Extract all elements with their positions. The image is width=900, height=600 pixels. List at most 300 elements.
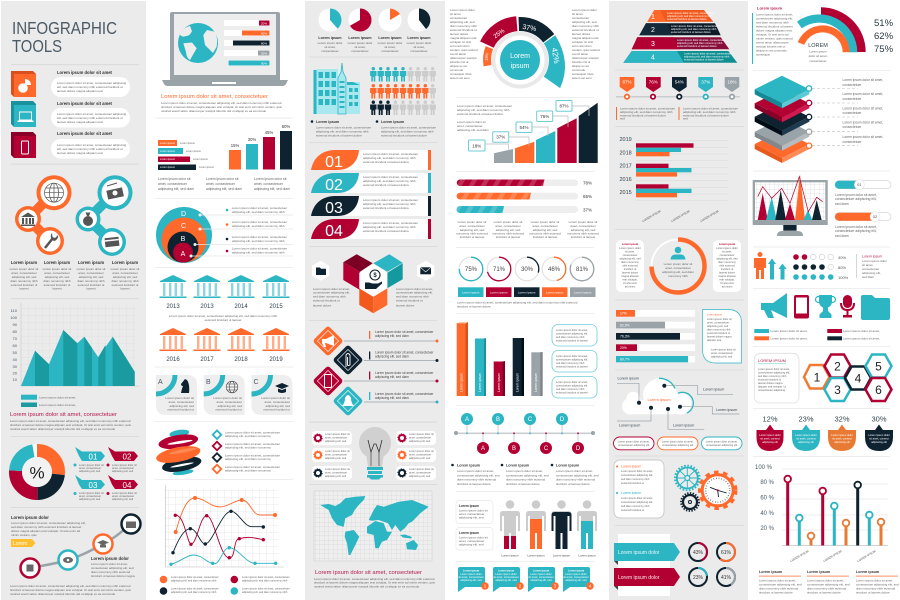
text block: row three bbox=[51, 131, 130, 158]
diagram: isometric stacked layers: consectetuer bbox=[842, 83, 862, 87]
text block: staircase: euismod tincidunt ut laoreet dolore bbox=[457, 112, 503, 116]
chart: percent drops: adipiscing elit bbox=[871, 440, 887, 444]
text block: four columns: Lorem ipsum dolor sit bbox=[10, 267, 38, 271]
legend: icon row: Lorem ipsum dolor sit amet, bbox=[843, 329, 880, 333]
heading: map: Lorem ipsum dolor sit amet, consectetuer bbox=[315, 570, 422, 576]
icon: trophy bbox=[816, 295, 836, 318]
chart: progress bars: 78% bbox=[583, 180, 592, 186]
list: numbered 01 to 04: 03 bbox=[325, 200, 343, 217]
chart: labelled progress tracks bbox=[616, 310, 695, 362]
side card: left of ring: Ut wisi enim bbox=[623, 281, 637, 285]
diagram: numbered hexagons: 1 bbox=[814, 370, 821, 384]
side card: right of ring: erat volutpat. bbox=[720, 278, 735, 282]
diagram: isometric cubes with hand and coin: laoreet dolore bbox=[396, 304, 415, 308]
text block: bar chart columns: amet, consectetuer bbox=[206, 182, 236, 186]
charts: four pies: Lorem ipsum dolor bbox=[318, 41, 342, 45]
callout: teal outline card: amet, consectetuer bbox=[711, 351, 733, 355]
legend: area chart: Lorem ipsum dolor sit amet, bbox=[39, 403, 76, 407]
cards: A B C: amet, consectetuer bbox=[264, 400, 290, 404]
text block: progress columns: tincidunt ut laoreet bbox=[571, 235, 595, 239]
labels: years top: 2015 bbox=[269, 304, 283, 310]
timeline: percent pin tags: 54% bbox=[675, 80, 684, 84]
chart: horizontal bars: Lorem ipsum bbox=[160, 149, 175, 153]
list: numbered 01 to 04: euismod tincidunt ut laoreet dolore bbox=[363, 229, 409, 233]
text block: buildings captions: euismod tincidunt ut laoreet dolore bbox=[316, 134, 362, 138]
text block: four columns: diam nonummy nibh bbox=[111, 279, 139, 283]
card: Lorem Ipsum outline: laoreet dolore magna bbox=[758, 381, 783, 385]
chart: radial segments: 15% bbox=[484, 52, 489, 61]
list: numbered 01 to 04: 01 bbox=[325, 154, 343, 171]
callouts: three outlined boxes: consectetuer adipiscing elit, bbox=[556, 332, 588, 336]
callouts: people text boxes: adipiscing elit, sed bbox=[459, 542, 484, 546]
side card: right of ring: tincidunt ut bbox=[721, 267, 734, 271]
chart: percent drops: sit amet, consect bbox=[832, 436, 852, 440]
text block: bar chart columns: amet, consectetuer bbox=[158, 182, 188, 186]
text block: four columns: adipiscing elit, sed bbox=[79, 275, 104, 279]
chart: progress bars bbox=[456, 180, 592, 213]
chart: dot matrix bbox=[793, 254, 849, 280]
text block: row three: elit, sed diam nonummy nibh euismod tincidunt ut bbox=[57, 147, 123, 151]
text block: radial right: Lorem ipsum dolor bbox=[572, 8, 597, 12]
icon: microphone bbox=[840, 295, 855, 318]
icon: credit card bbox=[105, 237, 119, 247]
text block: progress columns: tincidunt ut laoreet bbox=[533, 235, 557, 239]
list: sphere legend with diamonds: Lorem ipsum dolor sit amet, consectetuer bbox=[225, 442, 280, 446]
text block: lollipop columns: diam nonummy nibh euismod bbox=[759, 586, 799, 590]
text block: dot matrix note bbox=[856, 254, 887, 279]
diagram: isometric stacked layers: Lorem ipsum dolor sit amet, bbox=[842, 106, 883, 110]
callout: teal outline card: aliquam erat bbox=[707, 338, 722, 342]
labels: years top bbox=[166, 304, 283, 310]
chart: vertical bars: 15% bbox=[231, 143, 239, 148]
diagram: isometric stacked layers: consectetuer bbox=[842, 111, 862, 115]
icon: phone bbox=[324, 374, 332, 388]
icon: crimson cube with phone bbox=[11, 132, 36, 158]
text block: map body: Lorem ipsum dolor sit amet, consectetuer adipiscing elit, sed diam nonummy nibh euismod bbox=[314, 577, 435, 581]
timeline: A B C D: D bbox=[560, 417, 565, 423]
list: numbered 01 to 04: adipiscing elit, sed diam nonummy nibh bbox=[363, 225, 416, 229]
text block: area chart body bbox=[10, 419, 131, 431]
callouts: people text boxes: Lorem ipsum dolor sit bbox=[459, 536, 488, 540]
callouts: people text boxes: adipiscing elit, sed bbox=[459, 516, 484, 520]
chart: percent rings: 46% bbox=[548, 267, 561, 273]
text block: lollipop columns: Lorem ipsum bbox=[759, 570, 783, 574]
chart: lollipop chart: 60 % bbox=[760, 496, 775, 502]
chart: dot matrix: 40% bbox=[838, 255, 846, 260]
text block: pin tags: Lorem ipsum dolor sit amet, consectetuer bbox=[620, 106, 675, 110]
text block: column one footer: tincidunt ut laoreet dolore magna aliquam erat volutpat. Ut wisi enim ad minim veniam, quis bbox=[10, 588, 131, 592]
legend: nested circles: adipiscing elit, sed diam nonummy nibh bbox=[232, 210, 285, 214]
list: diamond icon items: adipiscing elit, sed diam bbox=[375, 354, 409, 358]
chart: vertical bars: 30% bbox=[248, 137, 256, 142]
control: toggles with captions: consectetuer adipiscing elit, bbox=[835, 229, 877, 233]
text block: staircase: amet, consectetuer bbox=[457, 124, 483, 128]
bars: laptop screen: 30% bbox=[261, 51, 267, 55]
chart: percent drops bbox=[756, 414, 893, 451]
text block: radial right: commodo bbox=[572, 68, 586, 72]
list: numbered 01 to 04: Lorem ipsum dolor sit amet, consectetuer bbox=[363, 221, 418, 225]
text block: radial left: laoreet dolore bbox=[450, 32, 469, 36]
text block: lollipop columns: consectetuer adipiscing elit, sed bbox=[759, 582, 802, 586]
timeline: A B C D: B bbox=[512, 446, 516, 452]
chart: percent rings: 75% bbox=[465, 267, 478, 273]
text block: timeline columns: diam nonummy nibh euismod bbox=[506, 478, 546, 482]
chart: concentric arcs bbox=[797, 7, 894, 63]
cards: A B C: Lorem ipsum dolor sit bbox=[213, 396, 242, 400]
tags: numbered 01 to 04 bbox=[74, 447, 138, 501]
chart: yearly horizontal bars: 2016 bbox=[620, 177, 632, 183]
charts: four pies: consectetuer bbox=[410, 49, 428, 53]
chart: area chart: 40 bbox=[13, 357, 18, 362]
cards: A B C bbox=[156, 375, 292, 415]
text block: radial right: adipiscing elit, sed bbox=[572, 20, 597, 24]
chart: lollipop chart: 80 % bbox=[760, 480, 775, 486]
diagram: four-tier pyramid: adipiscing elit, sed diam nonummy nibh bbox=[677, 41, 723, 45]
card: bullet list: Lorem ipsum bbox=[621, 491, 641, 495]
chart: person ring: nonummy nibh bbox=[668, 274, 688, 278]
chart: staircase growth: 37% bbox=[496, 135, 505, 140]
diagram: four-tier pyramid: euismod tincidunt ut laoreet dolore bbox=[677, 44, 717, 48]
callout: teal outline card: euismod tincidunt ut bbox=[707, 331, 730, 335]
icon: orange cube with pie bbox=[11, 71, 36, 97]
tags: numbered 01 to 04: adipiscing elit, sed bbox=[112, 497, 134, 501]
text block: timeline columns: consectetuer adipiscing elit, sed bbox=[506, 474, 549, 478]
text block: map body: tincidunt ut laoreet dolore magna aliquam erat volutpat. Ut wisi enim ad minim veniam, quis bbox=[314, 581, 435, 585]
text block: buildings captions: adipiscing elit, sed diam nonummy nibh bbox=[381, 130, 434, 134]
diagram: cloud network: Lorem ipsum bbox=[647, 397, 671, 402]
callouts: teal speech bubbles: Lorem ipsum bbox=[463, 568, 480, 572]
panel: column one background bbox=[1, 1, 146, 600]
tags: numbered 01 to 04: 01 bbox=[89, 452, 98, 462]
text block: under buttons: tincidunt ut laoreet dolore bbox=[457, 304, 491, 308]
callouts: teal speech bubbles: Lorem ipsum bbox=[533, 568, 550, 572]
panel: feature list with cubes bbox=[11, 64, 139, 165]
text block: laptop body bbox=[161, 101, 282, 113]
pills: three outlined labels: consectetuer adipiscing elit bbox=[706, 443, 738, 447]
text block: progress columns: amet, consectetuer bbox=[495, 224, 521, 228]
chart: labelled progress tracks: 76,3% bbox=[620, 335, 630, 339]
pills: three outlined labels: consectetuer adipiscing elit bbox=[618, 443, 650, 447]
text block: timeline columns: Lorem ipsum bbox=[556, 464, 580, 468]
labels: years top: 2013 bbox=[166, 304, 180, 310]
list: gear pills left: amet, consectetuer bbox=[325, 470, 347, 474]
chart: percent donut: % bbox=[29, 464, 45, 482]
charts: four pies: Lorem ipsum dolor bbox=[348, 41, 372, 45]
tag: yellow label bbox=[11, 539, 36, 547]
diagram: four-tier pyramid: adipiscing elit, sed diam nonummy nibh bbox=[684, 54, 730, 58]
diagram: numbered hexagons: 5 bbox=[875, 360, 882, 374]
charts: four pies: sit amet, bbox=[384, 45, 396, 49]
side card: right of ring: magna aliquam bbox=[718, 274, 736, 278]
text block: four columns: Lorem ipsum dolor sit bbox=[77, 267, 106, 271]
diagram: isometric cubes with hand and coin: laoreet dolore bbox=[313, 304, 332, 308]
chart: percent drops: adipiscing elit bbox=[762, 440, 778, 444]
callouts: people text boxes bbox=[456, 500, 493, 550]
diagram: four-tier pyramid: 3 bbox=[651, 41, 655, 48]
control: toggles with captions bbox=[835, 180, 891, 238]
panel: laptop illustration bbox=[162, 12, 288, 86]
text block: radial right: consequat. Duis bbox=[572, 72, 594, 76]
panel: column three background bbox=[305, 1, 445, 600]
pills: three outlined labels: Lorem ipsum dolor sit amet, bbox=[618, 440, 650, 444]
list: gear pills right: adipiscing elit, sed bbox=[409, 456, 431, 460]
heading: laptop: Lorem ipsum dolor sit amet, consectetuer bbox=[161, 94, 268, 100]
diagram: nested circles A to D bbox=[156, 206, 293, 263]
text block: timeline right: tincidunt ut laoreet dolore magna bbox=[91, 574, 135, 578]
timeline: A B C D: C bbox=[528, 417, 533, 423]
legend: multi-line chart: Lorem ipsum dolor sit amet, consectetuer bbox=[242, 586, 290, 590]
diagram: isometric stacked layers: consectetuer bbox=[842, 125, 862, 129]
card: bullet list: Lorem ipsum dolor sit amet, bbox=[621, 496, 653, 500]
illustration: striped sphere bbox=[155, 429, 203, 476]
callouts: three outlined boxes: euismod tincidunt ut laoreet bbox=[556, 390, 588, 394]
tags: numbered 01 to 04: Lorem ipsum dolor sit bbox=[112, 491, 137, 495]
text block: area chart body: Lorem ipsum dolor sit amet, consectetuer adipiscing elit, sed diam nonummy nibh euismod bbox=[10, 419, 131, 423]
chart: yearly horizontal bars: LOREM IPSUM bbox=[699, 209, 720, 223]
illustration: buildings bbox=[314, 63, 360, 114]
diagram: isometric cubes with hand and coin: sed diam nonummy nibh bbox=[313, 295, 346, 299]
chart: concentric arcs: 62% bbox=[874, 31, 894, 42]
list: gear pills right: Lorem ipsum dolor sit bbox=[409, 449, 434, 453]
icon: phone bbox=[794, 295, 809, 318]
text block: radial left: Lorem ipsum dolor bbox=[450, 8, 475, 12]
list: diamond icon items: Lorem ipsum dolor sit amet, consectetuer bbox=[375, 330, 434, 334]
callouts: teal speech bubbles: Lorem ipsum dolor bbox=[460, 572, 482, 576]
chart: lollipop chart: 40 % bbox=[760, 511, 775, 517]
chart: percent drops: Lorem ipsum dolor bbox=[868, 433, 890, 437]
chart: concentric arcs: consectetuer bbox=[809, 59, 827, 63]
diagram: isometric stacked layers: Lorem ipsum dolor sit amet, bbox=[842, 135, 883, 139]
callouts: teal speech bubbles: 3 bbox=[554, 584, 557, 589]
chart: horizontal bars: Lorem ipsum bbox=[186, 149, 201, 153]
chart: 3D bars: Lorem ipsum bbox=[516, 373, 520, 392]
chart: staircase growth: 54% bbox=[519, 125, 529, 130]
text block: concentric arcs intro: minim veniam, quis nostrud bbox=[756, 36, 793, 40]
text block: lollipop columns: consectetuer adipiscing elit, sed bbox=[856, 582, 899, 586]
diagram: four-tier pyramid: adipiscing elit, sed diam nonummy nibh bbox=[671, 27, 717, 31]
list: gear pills left: Lorem ipsum dolor sit bbox=[325, 432, 350, 436]
list: sphere legend with diamonds: adipiscing elit, sed diam nonummy bbox=[225, 468, 271, 472]
chart: area chart: 30 bbox=[13, 364, 18, 369]
timeline: A B C D bbox=[454, 413, 595, 454]
card: Lorem Ipsum outline: consectetuer adipiscing bbox=[758, 388, 786, 392]
chart: 3D bars: Lorem ipsum bbox=[460, 373, 464, 392]
chart: yearly horizontal bars: LOREM IPSUM bbox=[641, 209, 662, 223]
callouts: teal speech bubbles: sit amet, consectetuer bbox=[563, 575, 589, 579]
chart: progress bars: 65% bbox=[583, 194, 592, 199]
side card: left of ring: ad minim bbox=[625, 284, 635, 288]
heading: area chart: Lorem ipsum dolor sit amet, consectetuer bbox=[10, 412, 117, 418]
list: diamond icon items: adipiscing elit, sed diam bbox=[375, 334, 409, 338]
text block: progress columns: nonummy nibh euismod bbox=[456, 232, 488, 236]
card: bullet list: Lorem ipsum bbox=[621, 464, 641, 468]
charts: four donut rings: 61% bbox=[721, 550, 732, 556]
diagram: isometric cubes with hand and coin: euismod tincidunt ut bbox=[313, 299, 340, 303]
callout: teal outline card: Lorem ipsum dolor sit bbox=[711, 348, 736, 352]
list: numbered 01 to 04: Lorem ipsum dolor sit amet, consectetuer bbox=[363, 152, 418, 156]
list: numbered 01 to 04: adipiscing elit, sed diam nonummy nibh bbox=[363, 179, 416, 183]
text block: lollipop columns: diam nonummy nibh euismod bbox=[807, 586, 847, 590]
callouts: teal speech bubbles: 1 bbox=[484, 584, 487, 589]
side card: left of ring: erat volutpat. bbox=[622, 278, 638, 282]
side card: right of ring: Lorem ipsum bbox=[719, 242, 736, 246]
chart: people pictogram bbox=[370, 67, 436, 115]
side card: right of ring: laoreet dolore bbox=[719, 270, 735, 274]
text block: progress columns: adipiscing elit, sed bbox=[460, 228, 485, 232]
chart: horizontal bars: Lorem ipsum bbox=[193, 157, 208, 161]
diagram: orange icon network bbox=[15, 175, 72, 255]
card: bullet list: consectetuer adipiscing elit, bbox=[621, 500, 653, 504]
icon: bank bbox=[21, 212, 35, 226]
list: numbered 01 to 04 bbox=[311, 150, 431, 240]
text block: radial right: veniam, quis nostrud bbox=[572, 48, 600, 52]
text block: radial left: exerci tation bbox=[450, 52, 467, 56]
text block: radial right: magna aliquam erat bbox=[572, 36, 599, 40]
text block: timeline columns: Lorem ipsum dolor sit amet, bbox=[457, 469, 494, 473]
legend: nested circles: Lorem ipsum dolor sit amet, consectetuer bbox=[232, 246, 287, 250]
chart: staircase growth bbox=[468, 100, 598, 163]
diagram: four-tier pyramid: 2 bbox=[651, 27, 655, 34]
chart: multi-line chart bbox=[166, 485, 284, 567]
card: bullet list bbox=[614, 460, 664, 518]
pills: three outlined labels: Lorem ipsum dolor sit amet, bbox=[662, 440, 694, 444]
chart: percent drops: sit amet, consect bbox=[796, 436, 816, 440]
text block: laptop body: Lorem ipsum dolor sit amet, consectetuer adipiscing elit, sed diam nonummy nibh euismod bbox=[161, 101, 282, 105]
text block: row three: Lorem ipsum dolor sit amet bbox=[57, 131, 113, 136]
text block: row one: Lorem ipsum dolor sit amet bbox=[57, 70, 113, 75]
icons: person and arrows bbox=[754, 252, 786, 280]
text block: row three: laoreet dolore magna aliquam erat bbox=[57, 151, 103, 155]
diagram: rising timeline bbox=[20, 514, 140, 578]
icon: envelope bbox=[417, 261, 434, 281]
callouts: people text boxes: Lorem ipsum bbox=[459, 531, 479, 535]
text block: progress columns: nonummy nibh euismod bbox=[567, 232, 599, 236]
callouts: people text boxes: Lorem ipsum bbox=[459, 504, 479, 508]
tags: numbered 01 to 04: Lorem ipsum dolor sit bbox=[112, 463, 137, 467]
callouts: teal speech bubbles: adipiscing elit, sed bbox=[460, 578, 482, 582]
text block: timeline left: sed diam nonummy nibh euismod tincidunt ut laoreet bbox=[11, 525, 81, 529]
text block: radial left: euismod tincidunt ut bbox=[450, 28, 477, 32]
diagram: four-tier pyramid: euismod tincidunt ut laoreet dolore bbox=[684, 58, 724, 62]
text block: buildings captions bbox=[311, 120, 436, 138]
charts: four donut rings: 41% bbox=[721, 575, 732, 581]
text block: timeline left: Lorem ipsum dolor bbox=[11, 515, 49, 520]
timeline: percent pin tags: 37% bbox=[701, 80, 710, 84]
legend: multi-line chart bbox=[160, 575, 290, 595]
title: INFOGRAPHIC bbox=[12, 18, 117, 38]
text block: concentric arcs intro: consectetuer adipiscing elit, bbox=[756, 16, 793, 20]
bars: laptop screen: 60% bbox=[261, 31, 267, 35]
text block: progress columns: adipiscing elit, sed bbox=[496, 228, 521, 232]
side card: left of ring: consectetuer bbox=[623, 253, 638, 257]
text block: timeline right: Lorem ipsum dolor bbox=[91, 556, 129, 561]
diagram: four-tier pyramid: euismod tincidunt ut laoreet dolore bbox=[671, 30, 711, 34]
chart: labelled progress tracks: 89,7% bbox=[620, 358, 630, 362]
icon: paperclip bbox=[346, 354, 350, 367]
icon: globe bbox=[44, 183, 64, 202]
chart: horizontal bars bbox=[158, 140, 214, 170]
text block: four columns: amet, consectetuer bbox=[44, 271, 70, 275]
diagram: numbered hexagons: 4 bbox=[855, 372, 862, 386]
diagram: isometric cubes with hand and coin: Lorem ipsum dolor sit amet, bbox=[396, 287, 433, 291]
text block: four columns: Lorem ipsum bbox=[112, 260, 138, 265]
list: gear pills right: amet, consectetuer bbox=[409, 452, 431, 456]
text block: four columns: laoreet bbox=[120, 286, 130, 290]
text block: radial right: ullamcorper suscipit bbox=[572, 56, 599, 60]
list: gear pills left bbox=[312, 431, 352, 480]
chart: lollipop chart: 100 % bbox=[755, 465, 773, 471]
text block: four columns: diam nonummy nibh bbox=[43, 279, 71, 283]
chart: radial segments: 25% bbox=[493, 28, 507, 40]
text block: four columns: amet, consectetuer bbox=[78, 271, 104, 275]
icon: banknote bbox=[106, 183, 124, 200]
text block: column one footer bbox=[10, 584, 131, 596]
chart: area chart: 60 bbox=[13, 343, 18, 348]
card: bullet list: consectetuer adipiscing elit, bbox=[621, 473, 653, 477]
text block: progress columns: nonummy nibh euismod bbox=[529, 232, 561, 236]
text block: bar chart columns: amet, consectetuer bbox=[254, 182, 284, 186]
control: toggles with captions: 02 bbox=[873, 214, 878, 219]
chart: percent drops: 32% bbox=[834, 414, 850, 424]
text block: dot matrix note: consectetuer bbox=[862, 267, 879, 271]
text block: dot matrix note: sit amet, bbox=[862, 263, 874, 267]
charts: four pies: Lorem ipsum bbox=[318, 36, 342, 40]
callout: teal outline card: Lorem ipsum bbox=[707, 312, 722, 316]
text block: radial left: ullamcorper suscipit bbox=[450, 56, 477, 60]
text block: four columns: Lorem ipsum bbox=[11, 260, 37, 265]
text block: progress columns: amet, consectetuer bbox=[459, 224, 485, 228]
callouts: teal speech bubbles: Lorem ipsum dolor bbox=[495, 572, 517, 576]
chart: concentric arcs: Lorem ipsum bbox=[809, 50, 827, 54]
chart: percent drops: sit amet, consect bbox=[760, 436, 780, 440]
buttons: five labels: Lorem ipsum bbox=[462, 290, 480, 294]
text block: four columns: adipiscing elit, sed bbox=[45, 275, 70, 279]
text block: buildings captions: Lorem ipsum bbox=[316, 120, 340, 124]
diagram: four-tier pyramid bbox=[623, 10, 737, 63]
text block: four columns: adipiscing elit, sed bbox=[12, 275, 37, 279]
text block: four columns: euismod tincidunt ut bbox=[78, 283, 105, 287]
charts: four pies: sit amet, bbox=[324, 45, 336, 49]
diagram: nested circles A to D: C bbox=[181, 223, 186, 230]
text block: radial left: volutpat. Ut wisi bbox=[450, 40, 471, 44]
chart: percent drops: 30% bbox=[871, 414, 887, 424]
text block: timeline left bbox=[11, 515, 86, 537]
list: gear pills right: Lorem ipsum dolor sit bbox=[409, 432, 434, 436]
text block: buildings captions: adipiscing elit, sed diam nonummy nibh bbox=[316, 130, 369, 134]
chart: percent drops: 23% bbox=[798, 414, 814, 424]
text block: timeline left: minim veniam, quis bbox=[11, 533, 37, 537]
chart: progress bars: 37% bbox=[583, 208, 592, 212]
diagram: four-tier pyramid: Lorem ipsum dolor sit amet, consectetuer bbox=[677, 38, 725, 42]
charts: four pies: consectetuer bbox=[351, 49, 369, 53]
chart: people figures: Lorem ipsum bbox=[578, 554, 596, 558]
card: bullet list: sed diam nonummy nibh bbox=[621, 504, 650, 508]
chart: radial segments: 42% bbox=[550, 47, 561, 64]
pills: three outlined labels: Lorem ipsum dolor sit amet, bbox=[706, 440, 738, 444]
text block: staircase bbox=[457, 104, 512, 132]
callouts: teal speech bubbles: Lorem ipsum dolor bbox=[565, 572, 587, 576]
cards: A B C: B bbox=[206, 379, 211, 386]
chart: person ring: amet, consectetuer bbox=[665, 266, 691, 270]
text block: pin tags: euismod tincidunt ut laoreet dolore bbox=[620, 114, 666, 118]
chart: percent drops: 12% bbox=[762, 414, 778, 424]
text block: timeline columns: consectetuer adipiscing elit, sed bbox=[457, 474, 500, 478]
callouts: three outlined boxes: sed diam nonummy nibh bbox=[556, 387, 585, 391]
text block: concentric arcs intro: Lorem ipsum dolor sit amet, bbox=[756, 12, 793, 16]
text block: pin tags: adipiscing elit, sed diam nonummy nibh bbox=[683, 110, 736, 114]
chart: vertical bars: 45% bbox=[265, 130, 273, 135]
legend: multi-line chart: adipiscing elit, sed diam nonummy nibh bbox=[242, 578, 288, 582]
